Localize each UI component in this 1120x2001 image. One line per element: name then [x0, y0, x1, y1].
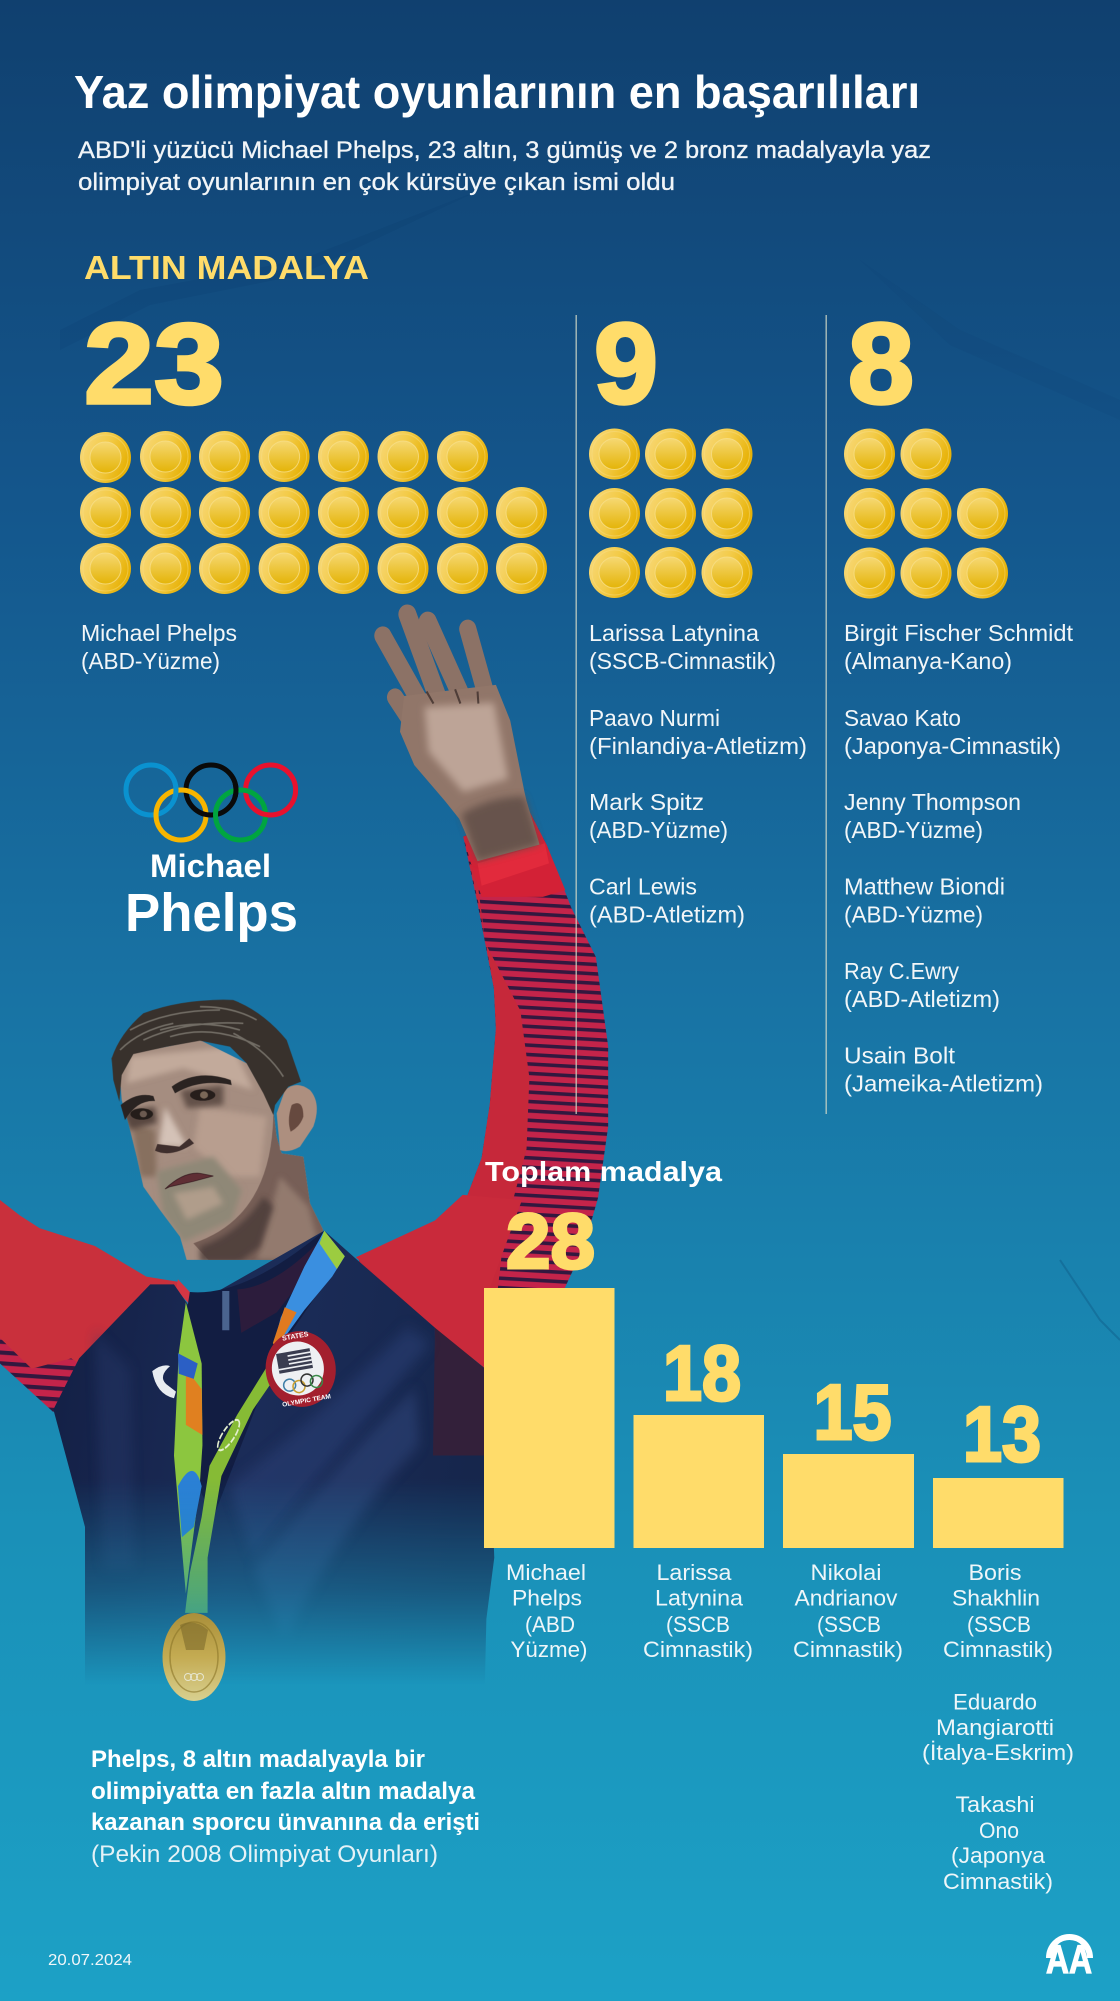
name list: 9 golds: (SSCB-Cimnastik) [589, 648, 776, 674]
badge: US Olympic team: OLYMPIC TEAM [282, 1393, 331, 1409]
name list: 9 golds: (ABD-Yüzme) [589, 817, 728, 843]
bar label: Nikolai Andrianov [793, 1560, 903, 1662]
bar label: Nikolai Andrianov: Nikolai [810, 1560, 882, 1585]
heading: gold medals: ALTIN MADALYA [84, 249, 369, 286]
callout: Beijing 2008 record [91, 1746, 480, 1868]
bar label: Nikolai Andrianov: Andrianov [794, 1586, 898, 1610]
bar: 28: 28 [506, 1197, 595, 1285]
callout: Beijing 2008 record: Phelps, 8 altın madalyayla bir [91, 1746, 425, 1773]
name list: 9 golds: (Finlandiya-Atletizm) [589, 733, 807, 759]
name list: 8 golds: Matthew Biondi [844, 874, 1005, 900]
name list: 8 golds: Savao Kato [844, 705, 961, 731]
divider 2 [826, 315, 827, 1114]
subtitle: ABD'li yüzücü Michael Phelps, 23 altın, 3 gümüş ve 2 bronz madalyayla yaz [78, 137, 931, 164]
icon: Olympic rings [126, 765, 296, 840]
name list: 9 golds: Carl Lewis [589, 874, 697, 900]
medal icons: 9 gold [589, 428, 752, 598]
name list: 23 golds [81, 620, 237, 674]
bar label: Larissa Latynina: Latynina [655, 1586, 743, 1610]
name list: 8 golds: Ray C.Ewry [844, 958, 959, 984]
bar label: Boris Shakhlin, Eduardo Mangiarotti, Takashi Ono: (Japonya [951, 1843, 1045, 1868]
bar label: Michael Phelps: (ABD [525, 1612, 575, 1637]
name list: 9 golds: (ABD-Atletizm) [589, 902, 745, 928]
bar label: Boris Shakhlin, Eduardo Mangiarotti, Takashi Ono: Cimnastik) [943, 1637, 1053, 1662]
number 9: 9 [594, 301, 658, 428]
subtitle [78, 137, 931, 196]
name list: 8 golds [844, 620, 1074, 1096]
bar label: Michael Phelps: Yüzme) [510, 1637, 588, 1662]
bar label: Boris Shakhlin, Eduardo Mangiarotti, Takashi Ono: Mangiarotti [936, 1715, 1054, 1740]
bar label: Larissa Latynina: (SSCB [666, 1612, 730, 1637]
bar label: Michael Phelps: Michael [506, 1560, 586, 1585]
bar: 15 [783, 1368, 914, 1548]
name list: 9 golds: Mark Spitz [589, 789, 704, 815]
number 8: 8 [848, 301, 914, 428]
medal icons: 23 gold [80, 431, 547, 594]
name list: 8 golds: (ABD-Atletizm) [844, 986, 1000, 1012]
callout: Beijing 2008 record: olimpiyatta en fazla altın madalya [91, 1778, 476, 1805]
bar label: Boris Shakhlin, Eduardo Mangiarotti, Takashi Ono: Takashi [956, 1792, 1034, 1817]
gold medal [162, 1613, 226, 1701]
bar label: Boris Shakhlin, Eduardo Mangiarotti, Takashi Ono: (İtalya-Eskrim) [922, 1740, 1074, 1765]
name list: 9 golds [589, 620, 807, 928]
bar label: Michael Phelps [506, 1560, 588, 1662]
photo: Michael Phelps waving [0, 614, 608, 1788]
name list: 9 golds: Larissa Latynina [589, 620, 759, 646]
bar label: Larissa Latynina: Cimnastik) [643, 1637, 753, 1662]
date: 20.07.2024 [48, 1952, 132, 1969]
bar label: Michael Phelps: Phelps [512, 1586, 582, 1610]
raised hand [383, 614, 540, 861]
bar label: Boris Shakhlin, Eduardo Mangiarotti, Takashi Ono: Shakhlin [952, 1586, 1040, 1610]
bar: 13: 13 [963, 1390, 1041, 1478]
bar: 18: 18 [663, 1329, 741, 1417]
bar label: Nikolai Andrianov: (SSCB [817, 1612, 881, 1637]
medal icons: 8 gold [844, 428, 1008, 598]
bar label: Boris Shakhlin, Eduardo Mangiarotti, Takashi Ono: Ono [979, 1818, 1019, 1843]
bar label: Larissa Latynina [643, 1560, 753, 1662]
bar label: Larissa Latynina: Larissa [656, 1560, 732, 1585]
bar: 28 [484, 1197, 614, 1548]
name list: 23 golds: (ABD-Yüzme) [81, 648, 220, 674]
name list: 8 golds: (Japonya-Cimnastik) [844, 733, 1061, 759]
raised sleeve [359, 810, 608, 1359]
name list: 8 golds: (ABD-Yüzme) [844, 902, 983, 928]
name list: 8 golds: Usain Bolt [844, 1042, 956, 1068]
subtitle: olimpiyat oyunlarının en çok kürsüye çıkan ismi oldu [78, 169, 675, 196]
bar label: Nikolai Andrianov: Cimnastik) [793, 1637, 903, 1662]
bar: 15: 15 [814, 1368, 892, 1456]
name list: 23 golds: Michael Phelps [81, 620, 237, 646]
torso: jacket, left arm, shoulder [0, 1194, 522, 1672]
head [112, 1000, 333, 1263]
callout: Beijing 2008 record: kazanan sporcu ünvanına da erişti [91, 1809, 480, 1836]
name list: 8 golds: (ABD-Yüzme) [844, 817, 983, 843]
badge: US Olympic team: STATES [282, 1331, 309, 1343]
logo: Olympic rings with Michael Phelps wordmark [125, 765, 298, 943]
name list: 9 golds: Paavo Nurmi [589, 705, 720, 731]
bar: 13 [933, 1390, 1064, 1548]
heading: total medals: Toplam madalya [485, 1156, 722, 1187]
callout: Beijing 2008 record: (Pekin 2008 Olimpiyat Oyunları) [91, 1841, 438, 1868]
bar label: Boris Shakhlin, Eduardo Mangiarotti, Takashi Ono: (SSCB [967, 1612, 1031, 1637]
number 23: 23 [84, 301, 224, 428]
bar chart: total medals [484, 1197, 1064, 1548]
bar label: Boris Shakhlin, Eduardo Mangiarotti, Takashi Ono: Cimnastik) [943, 1869, 1053, 1894]
name list: 8 golds: (Jameika-Atletizm) [844, 1070, 1043, 1096]
name list: 8 golds: Birgit Fischer Schmidt [844, 620, 1074, 646]
badge: US Olympic team [266, 1331, 336, 1407]
icon: AA logo: AA [1046, 1938, 1092, 1982]
divider 1 [576, 315, 577, 1114]
bar: 18 [634, 1329, 764, 1548]
logo: Olympic rings with Michael Phelps wordmark: Michael [150, 848, 271, 884]
bar label: Boris Shakhlin, Eduardo Mangiarotti, Takashi Ono [922, 1560, 1074, 1894]
title: Yaz olimpiyat oyunlarının en başarılıları [74, 66, 920, 118]
bar label: Boris Shakhlin, Eduardo Mangiarotti, Takashi Ono: Boris [968, 1560, 1022, 1585]
bar label: Boris Shakhlin, Eduardo Mangiarotti, Takashi Ono: Eduardo [953, 1690, 1037, 1714]
logo: Olympic rings with Michael Phelps wordmark: Phelps [125, 883, 298, 943]
name list: 8 golds: Jenny Thompson [844, 789, 1021, 815]
name list: 8 golds: (Almanya-Kano) [844, 648, 1012, 674]
